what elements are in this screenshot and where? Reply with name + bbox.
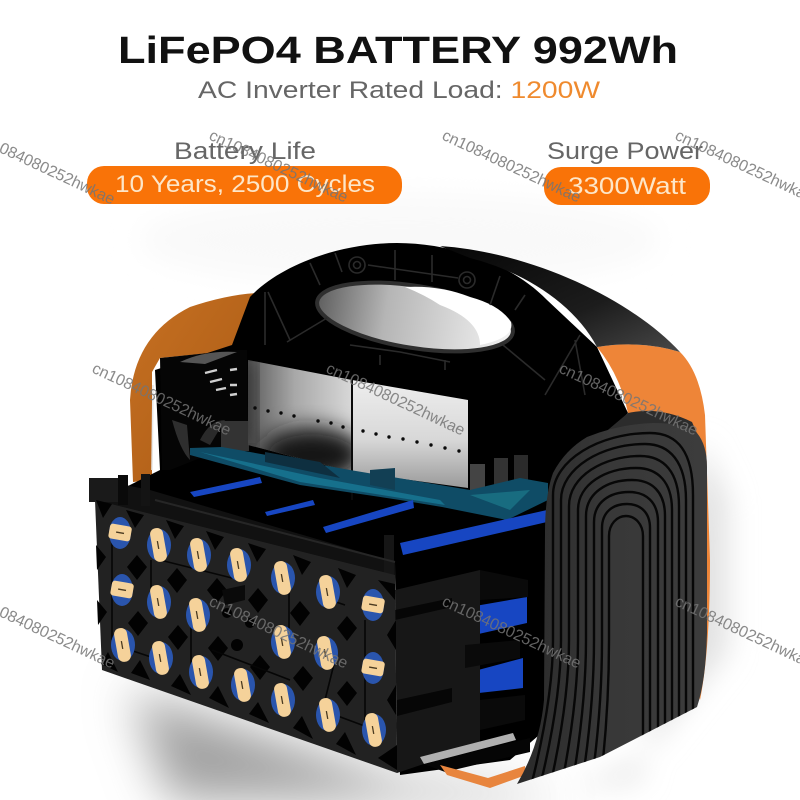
battery holder side bbox=[395, 570, 530, 773]
handle hole bbox=[312, 271, 518, 363]
right orange shell bbox=[597, 344, 710, 700]
fin side panel bbox=[517, 423, 707, 790]
label: battery life: Battery Life bbox=[174, 138, 316, 165]
label: surge power: Surge Power bbox=[547, 138, 703, 165]
watermarks bbox=[0, 127, 800, 672]
watermarks: cn1084080252hwkae bbox=[556, 360, 700, 439]
product: power station cutaway bbox=[89, 243, 710, 790]
metal heat sink bbox=[240, 355, 468, 500]
battery holder front bbox=[95, 500, 397, 773]
battery cell terminals bbox=[108, 517, 386, 748]
orange foot bbox=[440, 765, 526, 788]
circuit board bbox=[190, 447, 548, 520]
badge: surge power value bbox=[544, 167, 710, 205]
handle ribs bbox=[265, 250, 585, 395]
badge: battery life value bbox=[87, 166, 402, 204]
badge: surge power value: 3300Watt bbox=[568, 173, 686, 200]
left orange shell bbox=[130, 293, 256, 482]
capacitors bbox=[470, 455, 528, 490]
fan box bbox=[152, 350, 249, 470]
watermarks: cn1084080252hwkae bbox=[89, 360, 233, 439]
charcoal band under orange bbox=[590, 411, 702, 445]
watermarks: cn1084080252hwkae bbox=[439, 127, 583, 206]
watermarks: cn1084080252hwkae bbox=[206, 127, 350, 206]
battery holder top rim bbox=[89, 474, 396, 578]
ground shadow bbox=[130, 195, 728, 800]
black housing interior bbox=[100, 243, 628, 775]
watermarks: cn1084080252hwkae bbox=[439, 593, 583, 672]
watermarks: cn1084080252hwkae bbox=[206, 593, 350, 672]
charcoal outer shell bbox=[440, 246, 680, 352]
blue cell wraps bbox=[190, 477, 547, 696]
subtitle: inverter rated load: AC Inverter Rated Load: 1200W bbox=[198, 77, 600, 104]
badge: battery life value: 10 Years, 2500 Cycles bbox=[115, 171, 375, 198]
title: LiFePO4 BATTERY 992Wh bbox=[118, 30, 678, 72]
watermarks: cn1084080252hwkae bbox=[323, 360, 467, 439]
